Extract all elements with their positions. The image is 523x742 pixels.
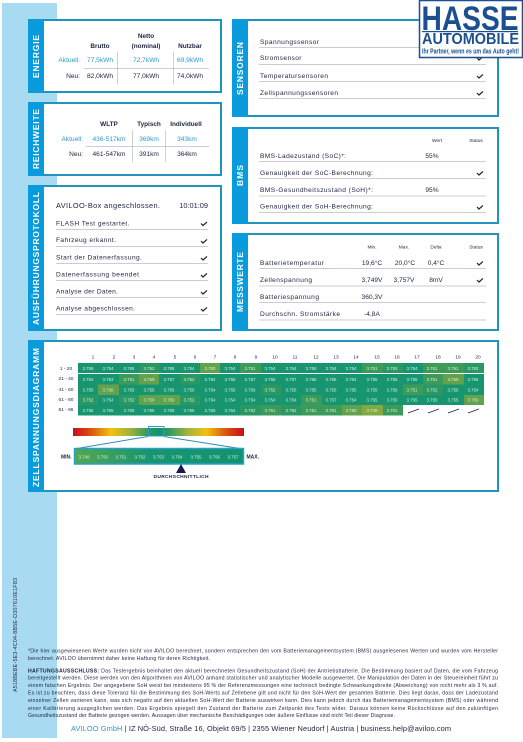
heatmap values: 3.757 [286,377,297,382]
heatmap values: 3.756 [82,408,94,413]
zoomed scale: MAX. [246,454,260,460]
zoomed scale: 3.756 [209,454,221,460]
heatmap values: 3.751 [406,387,418,392]
heatmap values: 3.757 [326,398,337,403]
column numbers: 13 [333,354,339,360]
energy table: 72,7kWh [133,57,159,64]
footnote [28,648,498,662]
protocol list: Analyse abgeschlossen. [56,306,135,312]
sensor list: Zellspannungssensoren [260,90,338,97]
heatmap values: 3.755 [366,387,378,392]
heatmap values: 3.754 [82,377,94,382]
heatmap values: 3.751 [306,398,317,403]
heading: Messwerte: MESSWERTE [235,252,245,312]
heatmap values: 3.755 [366,398,378,403]
range table: 436-517km [92,136,126,143]
heatmap values: 3.749 [366,408,378,413]
heatmap values: 3.755 [184,387,195,392]
column numbers: 20 [475,354,481,360]
logo: Hasse Automobile [420,0,522,58]
heatmap values: 3.751 [264,408,276,413]
row labels: 61 - 80 [59,397,74,403]
range table: Aktuell: [61,136,83,143]
heatmap values: 3.756 [144,408,155,413]
disclaimer: Es ist zu beachten, dass diese Toleranz für die Bestimmung des SoH-Werts auf Zellebene gilt und nicht für den SoH-Wert der gesamten Batterie. Dies liegt daran, dass der Ladezustand [28,690,498,696]
row labels: 21 - 40 [59,376,74,382]
zoomed scale: 3.751 [116,454,127,460]
heatmap values: 3.750 [144,377,155,382]
zoomed scale: 3.749 [78,454,90,460]
heatmap values: 3.754 [346,377,357,382]
sensor list [259,39,486,98]
BMS table [259,138,486,212]
measurement table: Batteriespannung [260,294,319,301]
heatmap values: 3.754 [204,398,216,403]
column numbers: 9 [255,354,258,360]
heatmap values: 3.755 [326,377,337,382]
disclaimer: HAFTUNGSAUSSCHLUSS: Das Testergebnis beinhaltet den aktuell berechneten Gesundheitszustand (SoH) der Antriebsbatterie. Die Bestimmung basiert auf Daten, die vom Fahrzeug [28,668,498,674]
column numbers: 17 [414,354,420,360]
heatmap values: 3.755 [82,366,94,371]
heatmap values: 3.750 [144,398,155,403]
range table: 391km [139,151,159,158]
heatmap values: 3.755 [406,377,418,382]
heatmap values: 3.756 [306,377,317,382]
energy table: Aktuell: [58,57,80,64]
range table: WLTP [100,121,119,128]
heatmap values: 3.750 [164,398,175,403]
footer contact line: AVILOO GmbH | IZ NÖ-Süd, Straße 16, Objekt 69/5 | 2355 Wiener Neudorf | Austria | business.help@aviloo.com [71,724,451,733]
zoomed scale: 3.750 [97,454,109,460]
heatmap values: 3.752 [468,366,479,371]
energy table: Netto [138,33,154,40]
heatmap values: 3.751 [426,377,438,382]
heatmap values: 3.755 [102,408,114,413]
heatmap values: 3.755 [366,377,378,382]
sensor list: Spannungssensor [260,39,320,46]
heatmap values: 3.755 [224,377,236,382]
measurement table: Status [469,244,483,250]
column numbers: 18 [435,354,441,360]
protocol list: AVILOO-Box angeschlossen. [56,201,160,210]
column numbers: 8 [234,354,237,360]
heatmap values: 3.755 [204,408,216,413]
heading: Sensoren: SENSOREN [235,42,245,95]
measurement table: Delta [430,244,442,250]
range table: Individuell [170,121,202,128]
heading: Zellspannungsdiagramm: ZELLSPANNUNGSDIAGRAMM [31,348,41,487]
heatmap values: 3.751 [426,366,438,371]
heatmap values: 3.752 [124,398,135,403]
heatmap values: 3.752 [144,366,155,371]
zoomed scale: 3.753 [153,454,165,460]
column numbers: 15 [374,354,380,360]
heatmap values: 3.755 [124,366,135,371]
energy table [58,33,209,84]
sensor list: Stromsensor [260,55,302,62]
heatmap values: 3.755 [426,398,438,403]
disclaimer: einzelner Zellen variieren kann, was sich negativ auf den aktuellen SoH-Wert der Batterie auswirken kann. Dies kann jedoch durch das Batteriemanagementsystem (BMS) oder während [28,698,498,704]
range table: Neu: [69,151,83,158]
sensor list: Temperatursensoren [260,73,328,80]
heatmap values: 3.752 [82,398,94,403]
panel: Zellspannungsdiagramm [28,340,498,492]
heatmap values: 3.754 [102,398,114,403]
BMS table: Genauigkeit der SoH-Berechnung: [260,204,373,210]
heatmap values: 3.756 [386,387,398,392]
heatmap values: 3.755 [124,408,135,413]
zoomed scale: 3.754 [172,454,183,460]
heatmap values: 3.755 [82,387,94,392]
heatmap values: 3.750 [346,408,357,413]
column numbers: 7 [214,354,217,360]
disclaimer: bereitgestellt werden. Diese werden von den Algorithmen von AVILOO anhand statistischer und analytischer Modelle ausgewertet. Die Manipulation der Daten in der Steuereinheit führt zu [28,676,498,682]
heatmap values: 3.752 [244,408,256,413]
heatmap values: 3.755 [306,366,317,371]
row labels: 81 - 96 [59,407,74,413]
heading: BMS: BMS [235,165,245,186]
measurement table: Zellenspannung [260,277,312,284]
range table: 364km [177,151,197,158]
column numbers: 3 [133,354,136,360]
disclaimer: einem falschen Ergebnis. Der angegebene SoH weist bei mindestens 95 % der Referenzmessungen eine technisch bedingte Schwankungsbreite (Abweichung) von nicht mehr als 3 % auf. [28,683,498,689]
measurement table: 360,3V [362,294,383,301]
energy table: Brutto [90,43,110,50]
heatmap values: 3.750 [204,366,216,371]
protocol list: Analyse der Daten. [56,288,118,296]
BMS table: Wert [432,138,443,144]
heatmap values: 3.755 [448,387,459,392]
range table: Typisch [137,121,161,128]
measurement table: Durchschn. Stromstärke [260,311,340,318]
heatmap values: 3.756 [244,387,256,392]
heatmap values: 3.754 [224,366,236,371]
column numbers: 10 [272,354,278,360]
heatmap values [82,366,479,413]
panel: Sensoren [232,19,498,117]
protocol list: Datenerfassung beendet [56,272,139,278]
heatmap values: 3.752 [386,366,398,371]
heatmap values: 3.753 [102,377,114,382]
measurement table: 8mV [429,277,443,284]
column numbers: 5 [174,354,177,360]
heatmap values: 3.754 [224,408,236,413]
range table: 461-547km [92,151,126,158]
heatmap values: 3.755 [346,387,357,392]
BMS table: Status [469,138,483,144]
panel: Messwerte [232,233,498,331]
heatmap values: 3.755 [326,387,337,392]
disclaimer: Gesundheitszustand der Batterie gezogen werden. Aussagen über mechanische Beschädigungen oder äußere Einflüsse sind nicht Teil dieser Diagnose. [28,713,395,719]
protocol list: FLASH Test gestartet. [56,220,130,228]
heading: Energie: ENERGIE [31,35,41,78]
measurement table: 19,6°C [362,259,382,267]
measurement table: 3,757V [394,277,415,284]
row labels [59,366,74,413]
energy table: 74,0kWh [177,73,203,80]
column numbers: 16 [394,354,400,360]
panel: BMS [232,127,498,224]
heading: Reichweite: REICHWEITE [31,109,41,169]
heatmap values: 3.755 [164,408,175,413]
heatmap values: 3.754 [326,366,337,371]
background strip [2,3,57,738]
energy table: Neu: [66,73,80,80]
BMS table: BMS-Ladezustand (SoC)*: [260,153,346,160]
column numbers [92,354,481,360]
measurement table: Max. [399,244,409,250]
heatmap cells [78,363,484,416]
average marker: DURCHSCHNITTLICH [154,474,209,480]
heatmap values: 3.751 [366,366,378,371]
energy table: Nutzbar [178,43,202,50]
measurement table: 0,4°C [428,259,445,267]
column numbers: 6 [194,354,197,360]
heatmap values: 3.755 [164,366,175,371]
heatmap values: 3.754 [244,398,256,403]
heatmap values: 3.754 [346,366,357,371]
column numbers: 1 [92,354,95,360]
energy table: 69,9kWh [177,57,203,64]
panel: Energie [28,19,221,93]
zoomed scale: MIN. [61,454,72,460]
measurement table: 3,749V [362,277,383,284]
measurement table: -4,8A [364,311,380,318]
footnote: *Die hier ausgewiesenen Werte wurden nicht von AVILOO berechnet, sondern entsprechen den vom Batteriemanagementsystem (BMS) ausgelesenen Werten und wurden vom Hersteller [28,648,498,654]
panel: Reichweite [28,102,221,176]
heatmap values: 3.755 [264,377,276,382]
heatmap values: 3.756 [164,387,175,392]
heatmap values: 3.752 [264,387,276,392]
heatmap values: 3.750 [448,377,459,382]
heatmap values: 3.755 [306,387,317,392]
heatmap values: 3.757 [164,377,175,382]
column numbers: 14 [353,354,359,360]
column numbers: 4 [153,354,156,360]
row labels: 41 - 60 [59,387,74,393]
range table: 343km [177,136,197,143]
range table [61,121,209,162]
BMS table: Genauigkeit der SoC-Berechnung: [260,170,373,177]
zoomed scale: 3.757 [228,454,239,460]
heatmap values: 3.754 [102,366,114,371]
disclaimer: einer Kalibrierung ausgeglichen werden. Das Ergebnis spiegelt den Zustand der Batterie zum Zeitpunkt des Tests wider. Daraus können keine Rückschlüsse auf den zukünftigen [28,706,498,712]
protocol list [56,201,208,314]
BMS table: 55% [425,153,439,160]
heatmap values: 3.751 [306,408,317,413]
heatmap values: 3.755 [286,387,297,392]
range table: 369km [139,136,159,143]
energy table: 77,5kWh [87,57,113,64]
column numbers: 11 [293,354,298,360]
gradient scale [73,426,244,449]
heading: Ausführungsprotokoll: AUSFÜHRUNGSPROTOKOLL [31,192,41,325]
panel: Ausführungsprotokoll [28,185,221,331]
energy table: (nominal) [132,43,160,50]
heatmap values: 3.754 [184,366,195,371]
average marker [154,464,209,480]
protocol list: Start der Datenerfassung. [56,254,142,262]
measurement table: Batterietemperatur [260,260,325,267]
heatmap values: 3.750 [468,398,479,403]
heatmap values: 3.754 [286,366,297,371]
measurement table: 20,0°C [395,259,415,267]
column numbers: 2 [113,354,116,360]
document id: A518BEBE-5E3-4C04-8B5E-D307610E1F83 [13,578,19,692]
heatmap values: 3.754 [468,387,479,392]
heatmap values: 3.752 [426,387,438,392]
heatmap values: 3.756 [184,408,195,413]
heatmap values: 3.752 [286,408,297,413]
heatmap values: 3.755 [468,377,479,382]
energy table: 82,0kWh [87,73,113,80]
heatmap values: 3.752 [184,398,195,403]
column numbers: 12 [313,354,319,360]
column numbers: 19 [455,354,461,360]
heatmap values: 3.756 [386,377,398,382]
heatmap values: 3.755 [406,398,418,403]
energy table: 77,0kWh [133,73,159,80]
protocol list: Fahrzeug erkannt. [56,237,116,244]
heatmap values: 3.754 [204,377,216,382]
heatmap values: 3.755 [224,387,236,392]
protocol list: 10:01:09 [179,201,208,210]
BMS table: BMS-Gesundheitszustand (SoH)*: [260,187,373,194]
heatmap values: 3.751 [124,377,135,382]
heatmap values: 3.754 [406,366,418,371]
heatmap values: 3.757 [244,377,256,382]
heatmap values: 3.752 [184,377,195,382]
heatmap values: 3.751 [448,366,459,371]
footnote: berechnet. AVILOO übernimmt daher keine Haftung für deren Richtigkeit. [28,656,210,662]
heatmap values: 3.754 [286,398,297,403]
zoomed scale: 3.755 [190,454,202,460]
zoomed scale: 3.752 [134,454,146,460]
heatmap values: 3.754 [346,398,357,403]
measurement table: Min. [367,244,377,250]
row labels: 1 - 20 [60,366,72,372]
disclaimer [28,668,498,719]
measurement table [259,244,486,320]
heatmap values: 3.751 [386,408,398,413]
heatmap values: 3.754 [224,398,236,403]
zoomed scale [61,448,260,464]
heatmap values: 3.754 [264,366,276,371]
heatmap values: 3.751 [326,408,337,413]
BMS table: 95% [425,187,439,194]
heatmap values: 3.751 [244,366,256,371]
heatmap values: 3.750 [102,387,114,392]
heatmap values: 3.754 [264,398,276,403]
heatmap values: 3.754 [204,387,216,392]
heatmap values: 3.755 [386,398,398,403]
heatmap values: 3.755 [448,398,459,403]
heatmap values: 3.755 [144,387,155,392]
heatmap values: 3.755 [124,387,135,392]
